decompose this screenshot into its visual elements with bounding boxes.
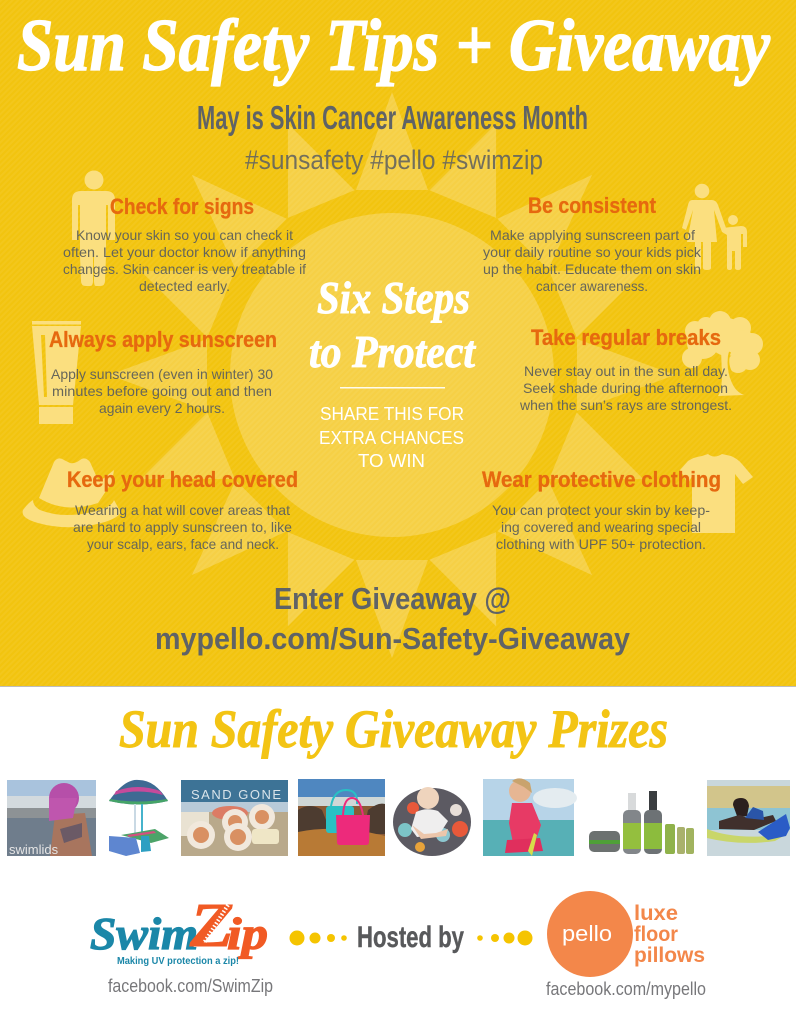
- tip: keep your head covered: are hard to apply sunscreen to, like: [73, 520, 292, 535]
- center heading: six steps to protect: Six Steps: [317, 272, 470, 323]
- tip: take regular breaks: [519, 325, 732, 413]
- hosted by: Hosted by: [357, 921, 464, 954]
- hashtags: #sunsafety #pello #swimzip: [245, 145, 543, 175]
- share callout: SHARE THIS FOR: [320, 404, 464, 424]
- icon: person: [72, 170, 115, 286]
- tip: wear protective clothing: clothing with UPF 50+ protection.: [496, 537, 706, 552]
- share callout: [319, 404, 464, 471]
- share callout: EXTRA CHANCES: [319, 428, 464, 448]
- tip: take regular breaks: Take regular breaks: [531, 325, 721, 350]
- tip: keep your head covered: your scalp, ears, face and neck.: [87, 537, 279, 552]
- icon: sunscreen tube: [32, 321, 81, 424]
- prize: girl in pink hat: [7, 780, 96, 857]
- logo: swimzip: Making UV protection a zip!: [117, 956, 239, 967]
- tip: be consistent: cancer awareness.: [536, 279, 648, 294]
- prizes heading: Sun Safety Giveaway Prizes: [119, 699, 668, 759]
- pello facebook: facebook.com/mypello: [546, 979, 706, 999]
- tip: wear protective clothing: Wear protective clothing: [482, 467, 721, 492]
- tip: check for signs: Know your skin so you can check it: [76, 228, 293, 243]
- tip: always apply sunscreen: minutes before going out and then: [52, 384, 272, 399]
- tip: check for signs: Check for signs: [110, 194, 254, 219]
- tip: take regular breaks: when the sun’s rays are strongest.: [519, 398, 732, 413]
- left dots: [290, 930, 347, 946]
- panel: yellow sun background: [0, 0, 796, 686]
- prize: bottled skin care products: [589, 791, 694, 854]
- tip: always apply sunscreen: [49, 327, 277, 416]
- tip: be consistent: Be consistent: [528, 193, 657, 218]
- tip: wear protective clothing: [482, 467, 721, 552]
- prize: girl in pink hat: swimlids: [9, 842, 59, 857]
- tip: be consistent: up the habit. Educate them on skin: [483, 262, 701, 277]
- subtitle: May is Skin Cancer Awareness Month: [197, 99, 588, 136]
- giveaway link: Enter Giveaway @: [274, 581, 511, 616]
- giveaway link: mypello.com/Sun-Safety-Giveaway: [155, 621, 631, 656]
- prize: sand gone: [181, 780, 288, 856]
- tip: keep your head covered: Keep your head covered: [67, 467, 298, 492]
- prize: sand gone: SAND GONE: [191, 787, 281, 802]
- tip: be consistent: your daily routine so your kids pick: [483, 245, 701, 260]
- logo: pello: floor: [634, 923, 678, 946]
- center heading: six steps to protect: [309, 272, 476, 377]
- logo: swimzip: [90, 892, 268, 967]
- swimzip facebook: facebook.com/SwimZip: [108, 976, 273, 996]
- icon: mother and child: [682, 184, 747, 270]
- logo: swimzip: Z: [189, 892, 234, 960]
- tip: always apply sunscreen: Always apply sunscreen: [49, 327, 277, 352]
- tip: check for signs: detected early.: [139, 279, 230, 294]
- tip: keep your head covered: [67, 467, 298, 552]
- tip: be consistent: Make applying sunscreen part of: [490, 228, 695, 243]
- tip: always apply sunscreen: again every 2 hours.: [99, 401, 225, 416]
- prize: toddler in pink swimwear: [483, 778, 577, 856]
- logo: swimzip: ip: [227, 908, 268, 959]
- center heading: six steps to protect: to Protect: [309, 326, 476, 377]
- tip: be consistent: [483, 193, 701, 294]
- prize: beach umbrella and towel: [109, 780, 169, 856]
- prize: woman on sun lounger: [707, 780, 790, 856]
- icon: tree: [682, 311, 763, 396]
- sun disc: [230, 213, 554, 537]
- icon: hat: [23, 458, 120, 527]
- logo: swimzip: Swim: [90, 908, 198, 959]
- tip: check for signs: often. Let your doctor know if anything: [63, 245, 306, 260]
- prize: baby on floor pillow: [393, 787, 471, 856]
- sun rays: [109, 92, 675, 658]
- giveaway link: [155, 581, 631, 656]
- share callout: TO WIN: [358, 451, 425, 471]
- tip: wear protective clothing: ing covered and wearing special: [501, 520, 701, 535]
- tip: wear protective clothing: You can protect your skin by keep-: [492, 503, 710, 518]
- tip: check for signs: changes. Skin cancer is very treatable if: [63, 262, 306, 277]
- right dots: [477, 930, 532, 946]
- sun ring: [209, 192, 575, 558]
- logo: pello: luxe: [634, 902, 678, 925]
- tip: always apply sunscreen: Apply sunscreen (even in winter) 30: [51, 367, 273, 382]
- tip: take regular breaks: Seek shade during the afternoon: [523, 381, 728, 396]
- logo: pello: pello: [562, 921, 612, 946]
- logo: pello: [547, 891, 705, 977]
- logo: pello: pillows: [634, 944, 705, 967]
- tip: keep your head covered: Wearing a hat will cover areas that: [75, 503, 290, 518]
- prize: beach totes: [298, 779, 385, 856]
- icon: t-shirt: [680, 454, 753, 533]
- tip: check for signs: [63, 194, 306, 294]
- tip: take regular breaks: Never stay out in the sun all day.: [524, 364, 728, 379]
- prize photos: [7, 778, 790, 857]
